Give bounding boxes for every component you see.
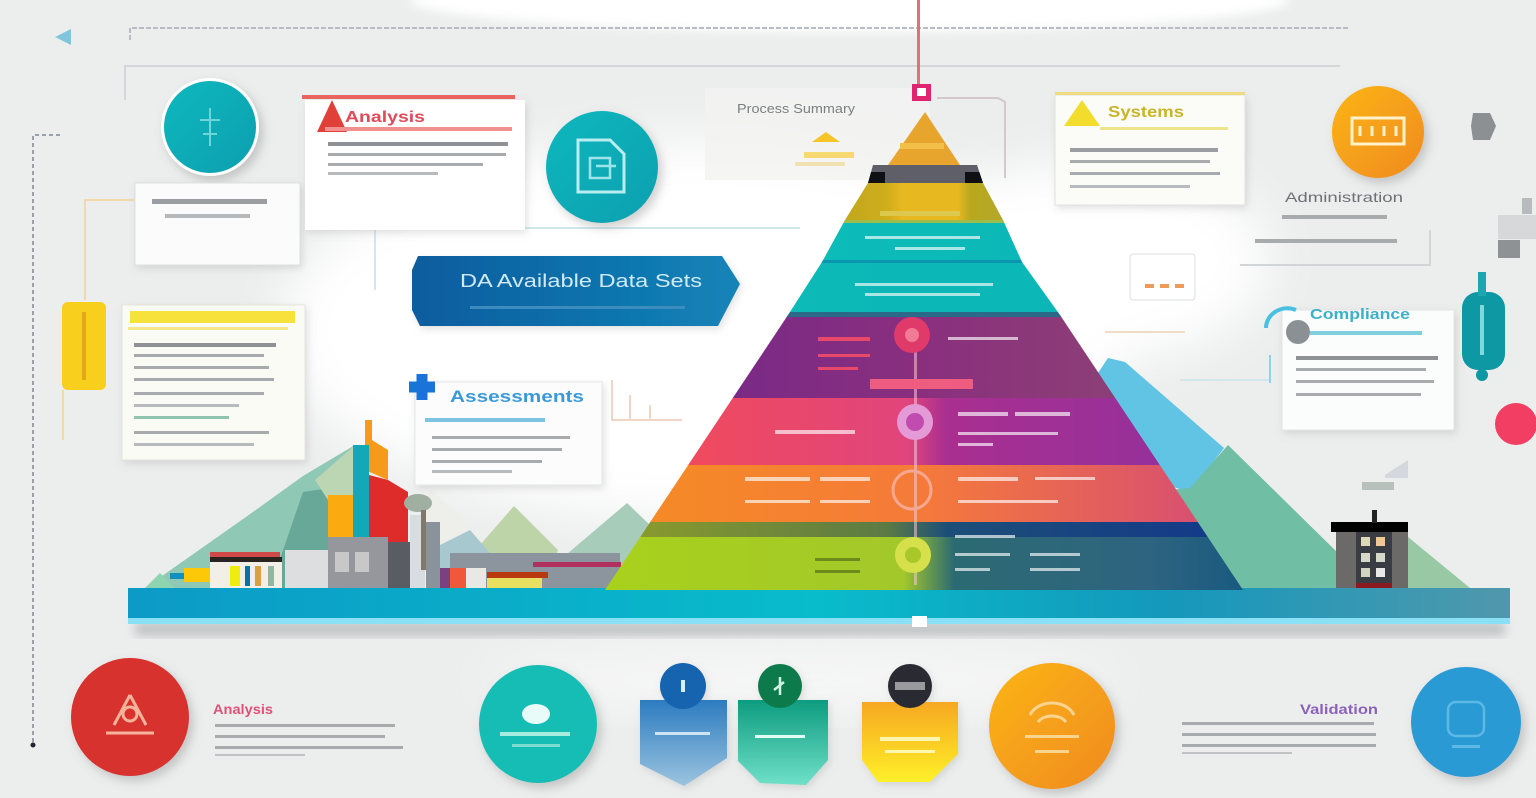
icon: yellow pill left	[62, 302, 106, 390]
icon: teal pill right	[1462, 272, 1505, 381]
text block: bottom left: Analysis	[213, 701, 273, 717]
chart: pyramid	[600, 110, 1250, 590]
callout: blue banner: DA Available Data Sets	[460, 271, 702, 291]
centre line	[914, 320, 917, 585]
icon: pink blob	[1495, 403, 1536, 445]
panel: top-left red card	[302, 95, 525, 230]
icon: green shield	[738, 664, 828, 785]
panel: yellow left card	[122, 305, 305, 460]
panel: top-right yellow card: Systems	[1108, 104, 1184, 121]
panel: card under teal circle	[135, 183, 300, 265]
faint chart marks beside pyramid	[612, 380, 682, 420]
panel: small orange note	[1130, 254, 1195, 300]
landscape: right mountains	[1090, 358, 1470, 588]
icon: teal circle bottom	[479, 665, 597, 783]
yellow tier highlight	[880, 211, 960, 216]
landscape: left buildings	[145, 420, 621, 588]
icon: right dark building	[1331, 510, 1408, 588]
text block: right heading	[1255, 189, 1403, 243]
panel: top-left red card: Analysis	[345, 109, 425, 126]
icon: grey hexagon	[1471, 113, 1496, 140]
icon: teal document circle	[546, 111, 658, 223]
icon: apex pink marker	[912, 84, 931, 101]
panel: assessment card: Assessments	[450, 387, 584, 406]
tier labels	[745, 236, 1095, 573]
tier markers	[893, 317, 933, 573]
icon: orange circle	[1332, 86, 1424, 178]
icon: blue circle bottom right	[1411, 667, 1521, 777]
panel: assessment card	[409, 374, 602, 485]
panel: top centre card: Process Summary	[737, 101, 856, 116]
top red vertical line	[917, 0, 920, 85]
text block: bottom right: Validation	[1300, 701, 1378, 717]
panel: top-right yellow card	[1055, 92, 1245, 205]
text block: bottom left	[213, 701, 403, 756]
icon: faint grey cloud	[1362, 460, 1408, 490]
pyramid bands	[600, 110, 1250, 590]
icon: teal circle top left	[161, 78, 259, 176]
text block: bottom right	[1182, 701, 1378, 754]
icon: orange circle bottom	[989, 663, 1115, 789]
apex lighter block	[900, 143, 944, 149]
panel: top centre card	[705, 88, 930, 180]
panel: right teal card	[1266, 306, 1454, 430]
icon: right edge device	[1498, 198, 1536, 258]
icon: blue shield	[640, 663, 727, 786]
panel: base platform	[128, 588, 1510, 636]
purple tier accents	[818, 337, 973, 389]
icon: red circle	[71, 658, 189, 776]
text block: right heading: Administration	[1285, 189, 1403, 205]
panel: right teal card: Compliance	[1310, 306, 1410, 323]
icon: yellow shield	[862, 664, 958, 782]
icon: small blue arrow	[55, 29, 71, 45]
callout: blue banner	[412, 256, 740, 326]
landscape: left mountains	[145, 445, 650, 588]
